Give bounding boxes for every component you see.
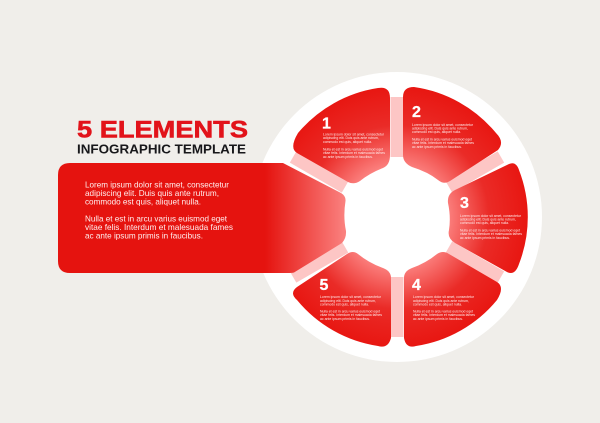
main body text: Nulla et est in arcu varius euismod eget — [85, 214, 228, 224]
panel: element 1 — [293, 88, 390, 183]
text 3: ac ante ipsum primis in faucibus. — [460, 236, 510, 240]
text 4: Lorem ipsum dolor sit amet, consectetur — [413, 295, 475, 299]
number 3: 3 — [460, 195, 469, 212]
segment 4 shape — [404, 252, 501, 347]
text 4: Nulla et est in arcu varius euismod eget — [413, 310, 473, 314]
text 3 — [460, 214, 522, 240]
main body text — [85, 180, 233, 240]
number 1: 1 — [322, 116, 331, 132]
text 1: adipiscing elit. Duis quis ante rutrum, — [323, 136, 379, 140]
main panel shape — [58, 163, 346, 273]
text 3: Nulla et est in arcu varius euismod eget — [460, 228, 520, 232]
connector spokes — [290, 97, 504, 337]
text 1: Nulla et est in arcu varius euismod eget — [323, 148, 383, 152]
text 2: commodo est quis, aliquet nulla. — [412, 130, 461, 134]
segment 5 shape — [293, 252, 391, 347]
text 4: adipiscing elit. Duis quis ante rutrum, — [413, 299, 469, 303]
text 5: ac ante ipsum primis in faucibus. — [320, 317, 370, 321]
text 4: ac ante ipsum primis in faucibus. — [413, 317, 463, 321]
text 5: adipiscing elit. Duis quis ante rutrum, — [320, 299, 376, 303]
text 3: vitae felis. Interdum et malesuada fames — [460, 232, 522, 236]
main body text: vitae felis. Interdum et malesuada fames — [85, 222, 233, 232]
text 3: adipiscing elit. Duis quis ante rutrum, — [460, 218, 516, 222]
text 1 — [323, 132, 385, 159]
main body text: commodo est quis, aliquet nulla. — [85, 196, 201, 206]
number 4: 4 — [412, 277, 421, 294]
subtitle: INFOGRAPHIC TEMPLATE — [77, 142, 246, 156]
text 5: commodo est quis, aliquet nulla. — [320, 302, 369, 306]
panel: element 5 — [293, 252, 391, 347]
text 4 — [413, 295, 475, 321]
text 2: ac ante ipsum primis in faucibus. — [412, 145, 462, 149]
text 2: vitae felis. Interdum et malesuada fames — [412, 141, 474, 145]
panel: element 2 — [403, 87, 501, 183]
segment 2 shape — [403, 87, 501, 183]
text 3: commodo est quis, aliquet nulla. — [460, 221, 509, 225]
text 2 — [412, 123, 474, 149]
white circle — [252, 72, 542, 362]
main body text: Lorem ipsum dolor sit amet, consectetur — [85, 180, 229, 190]
title: 5 ELEMENTS — [77, 116, 248, 144]
segment 3 shape — [448, 163, 528, 273]
text 5 — [320, 295, 382, 321]
text 4: commodo est quis, aliquet nulla. — [413, 302, 462, 306]
text 1: Lorem ipsum dolor sit amet, consectetur — [323, 132, 385, 136]
text 5: vitae felis. Interdum et malesuada fames — [320, 313, 382, 317]
segment 1 shape — [293, 88, 390, 183]
panel: element 4 — [404, 252, 501, 347]
text 5: Nulla et est in arcu varius euismod eget — [320, 310, 380, 314]
text 2: Nulla et est in arcu varius euismod eget — [412, 138, 472, 142]
panel: main text — [58, 163, 346, 273]
text 4: vitae felis. Interdum et malesuada fames — [413, 313, 475, 317]
number 2: 2 — [412, 104, 421, 121]
text 2: Lorem ipsum dolor sit amet, consectetur — [412, 123, 474, 127]
text 3: Lorem ipsum dolor sit amet, consectetur — [460, 214, 522, 218]
panel: element 3 — [448, 163, 528, 273]
text 1: ac ante ipsum primis in faucibus. — [323, 155, 373, 159]
main body text: ac ante ipsum primis in faucibus. — [85, 230, 203, 240]
text 5: Lorem ipsum dolor sit amet, consectetur — [320, 295, 382, 299]
text 1: vitae felis. Interdum et malesuada fames — [323, 151, 385, 155]
main body text: adipiscing elit. Duis quis ante rutrum, — [85, 188, 219, 198]
text 1: commodo est quis, aliquet nulla. — [323, 140, 372, 144]
number 5: 5 — [320, 277, 328, 294]
text 2: adipiscing elit. Duis quis ante rutrum, — [412, 126, 468, 130]
